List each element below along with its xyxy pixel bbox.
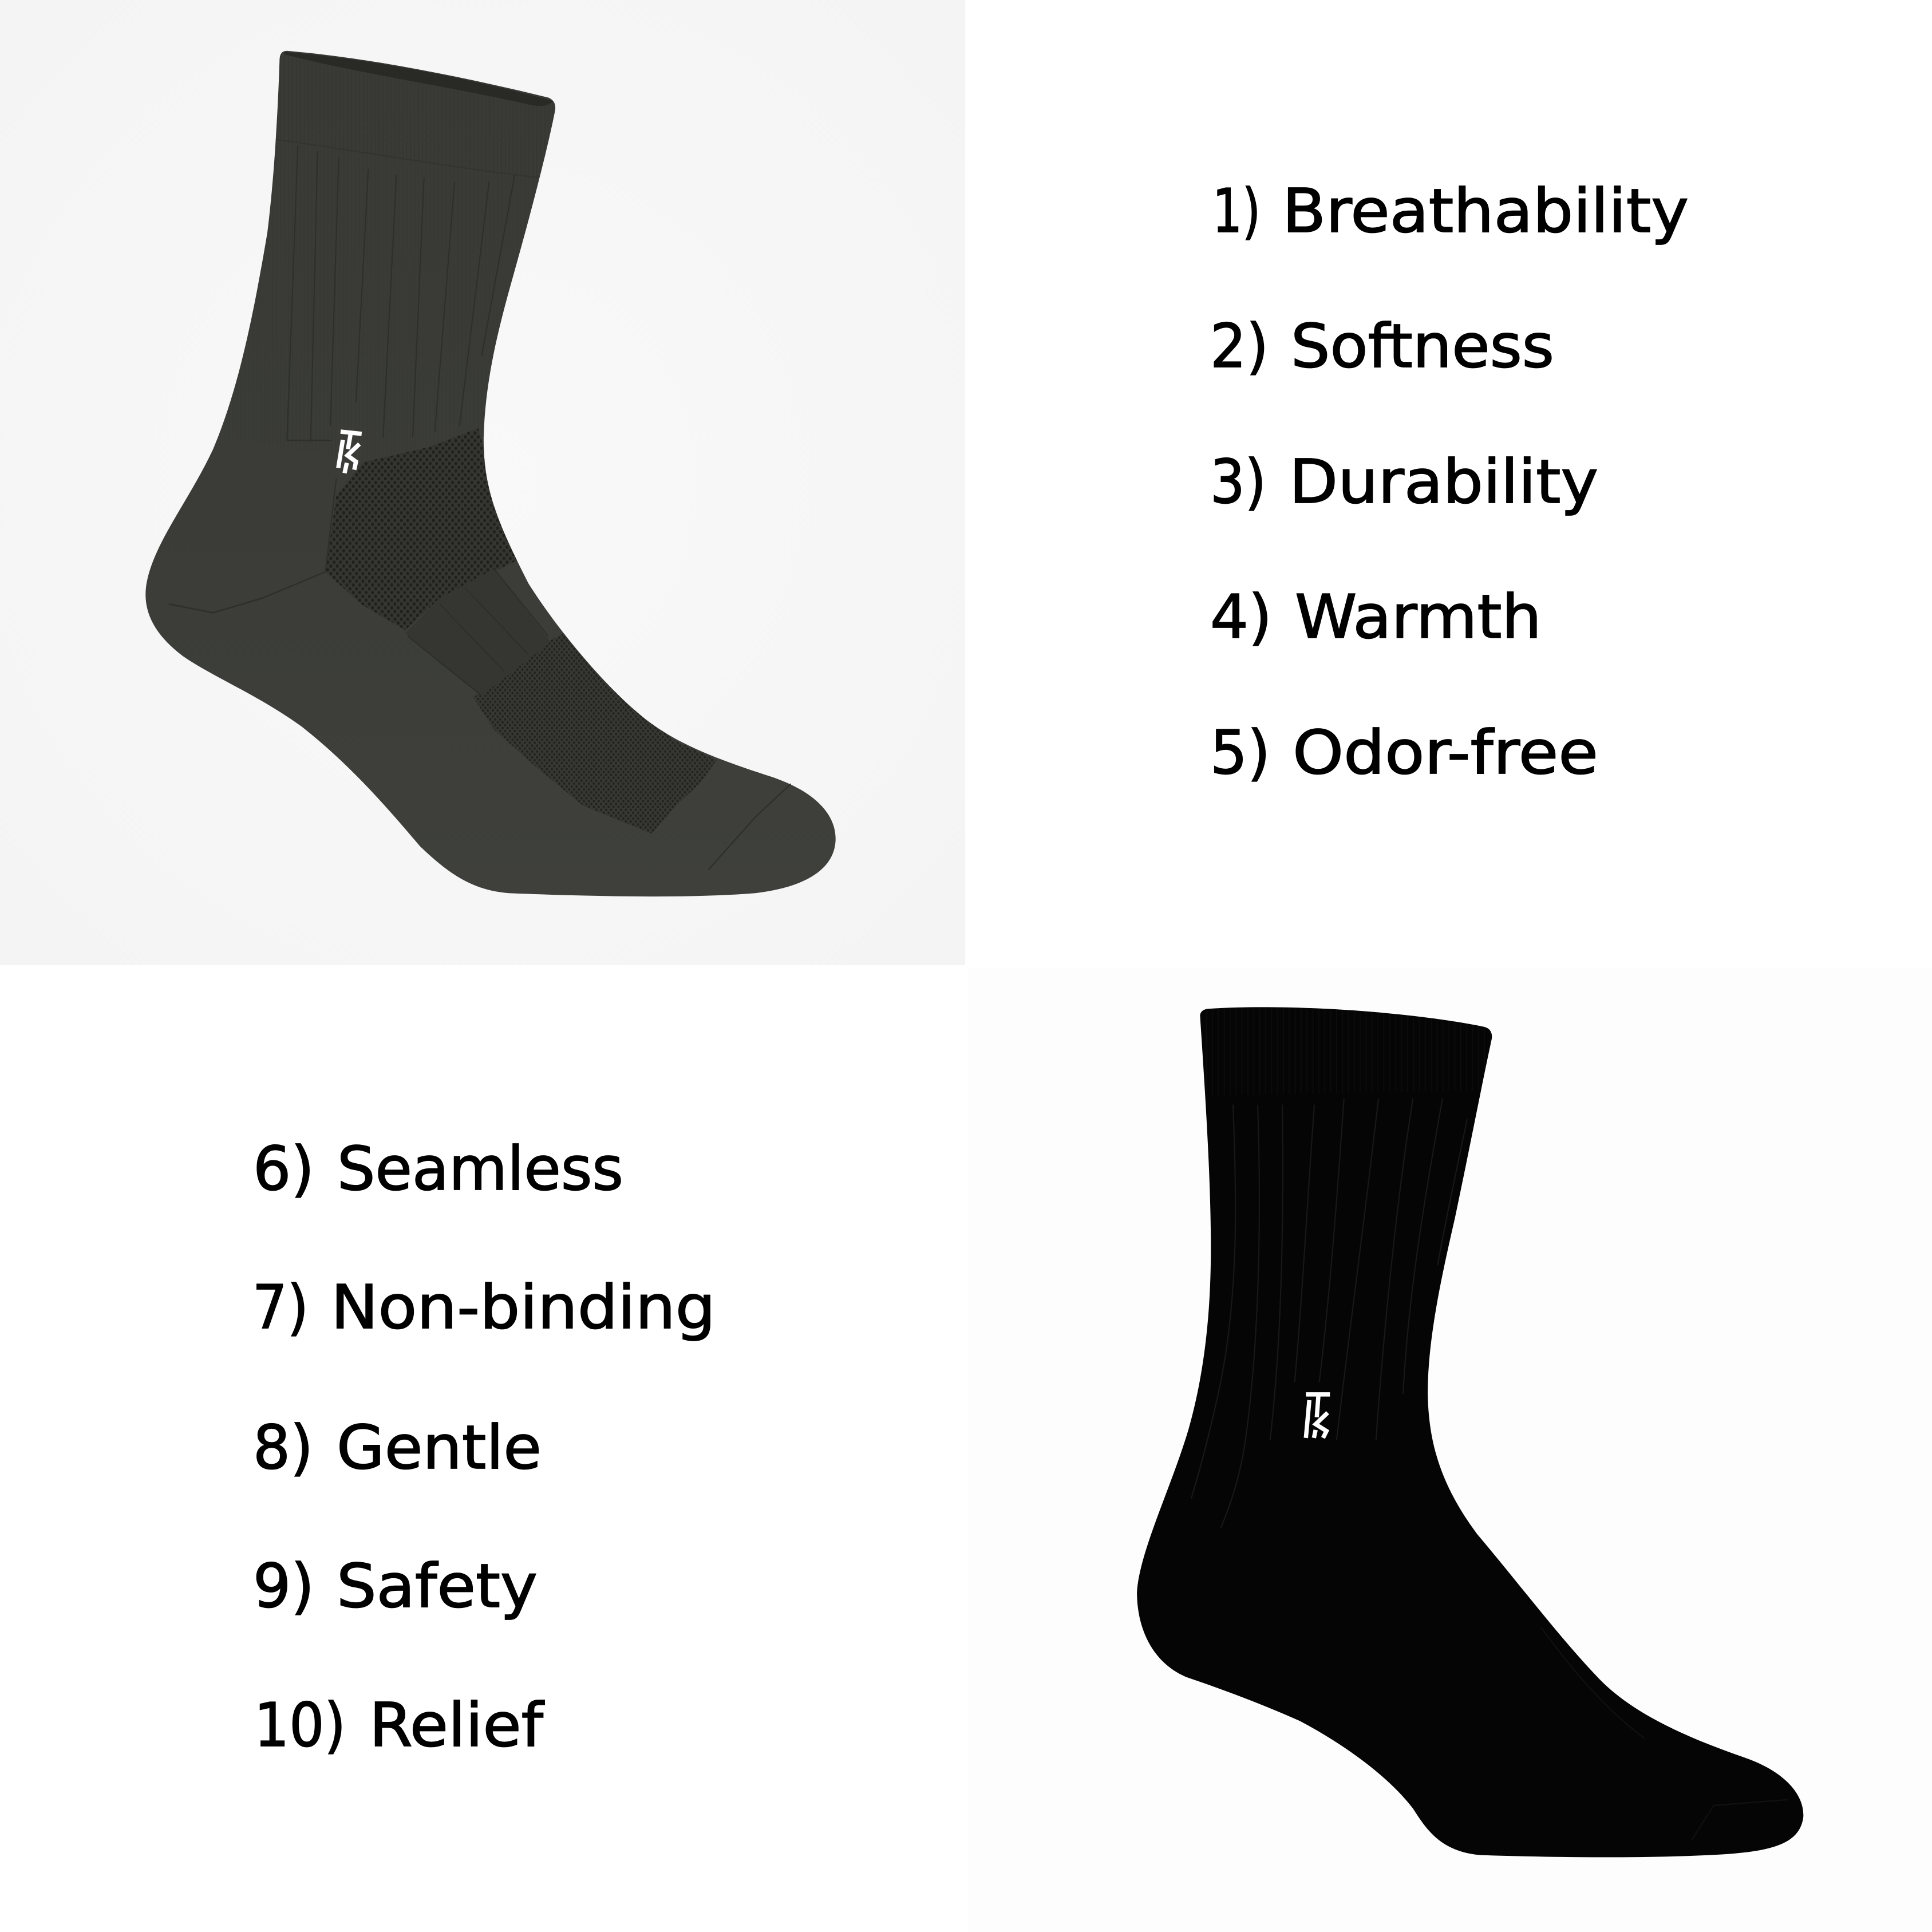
list item 7: 7) [252, 1273, 309, 1342]
list item 10 [254, 1690, 544, 1760]
list item 6: Seamless [337, 1134, 623, 1204]
list item 8: 8) [253, 1413, 313, 1483]
list item 10: Relief [369, 1690, 544, 1760]
list item 5: 5) [1210, 718, 1270, 788]
illustration: black ribbed sock [1137, 1007, 1803, 1857]
list item 2: 2) [1210, 311, 1269, 381]
list item 10: 10) [254, 1690, 346, 1760]
list item 4: 4) [1210, 582, 1272, 652]
list item 9: 9) [253, 1551, 314, 1621]
list item 8: Gentle [337, 1413, 542, 1483]
illustration: charcoal ribbed sock with mesh panels [145, 51, 836, 896]
panel: black sock photo [1137, 1007, 1803, 1857]
list item 3: 3) [1210, 447, 1266, 517]
list item 3: Durability [1289, 447, 1598, 517]
list: features six to ten [252, 1134, 716, 1760]
panel: charcoal sock photo [0, 0, 965, 965]
list item 4: Warmth [1295, 582, 1542, 652]
list item 7: Non-binding [331, 1273, 716, 1342]
list: features one to five [1210, 176, 1689, 788]
list item 5: Odor-free [1293, 718, 1598, 788]
list item 9: Safety [337, 1551, 538, 1621]
icon: TK logo [1306, 1394, 1330, 1438]
icon: TK logo [338, 432, 362, 473]
list item 2: Softness [1291, 311, 1554, 381]
list item 9 [253, 1551, 538, 1621]
list item 1: Breathability [1282, 176, 1689, 246]
list item 1: 1) [1212, 176, 1261, 246]
list item 8 [253, 1413, 542, 1483]
list item 6: 6) [253, 1134, 314, 1204]
